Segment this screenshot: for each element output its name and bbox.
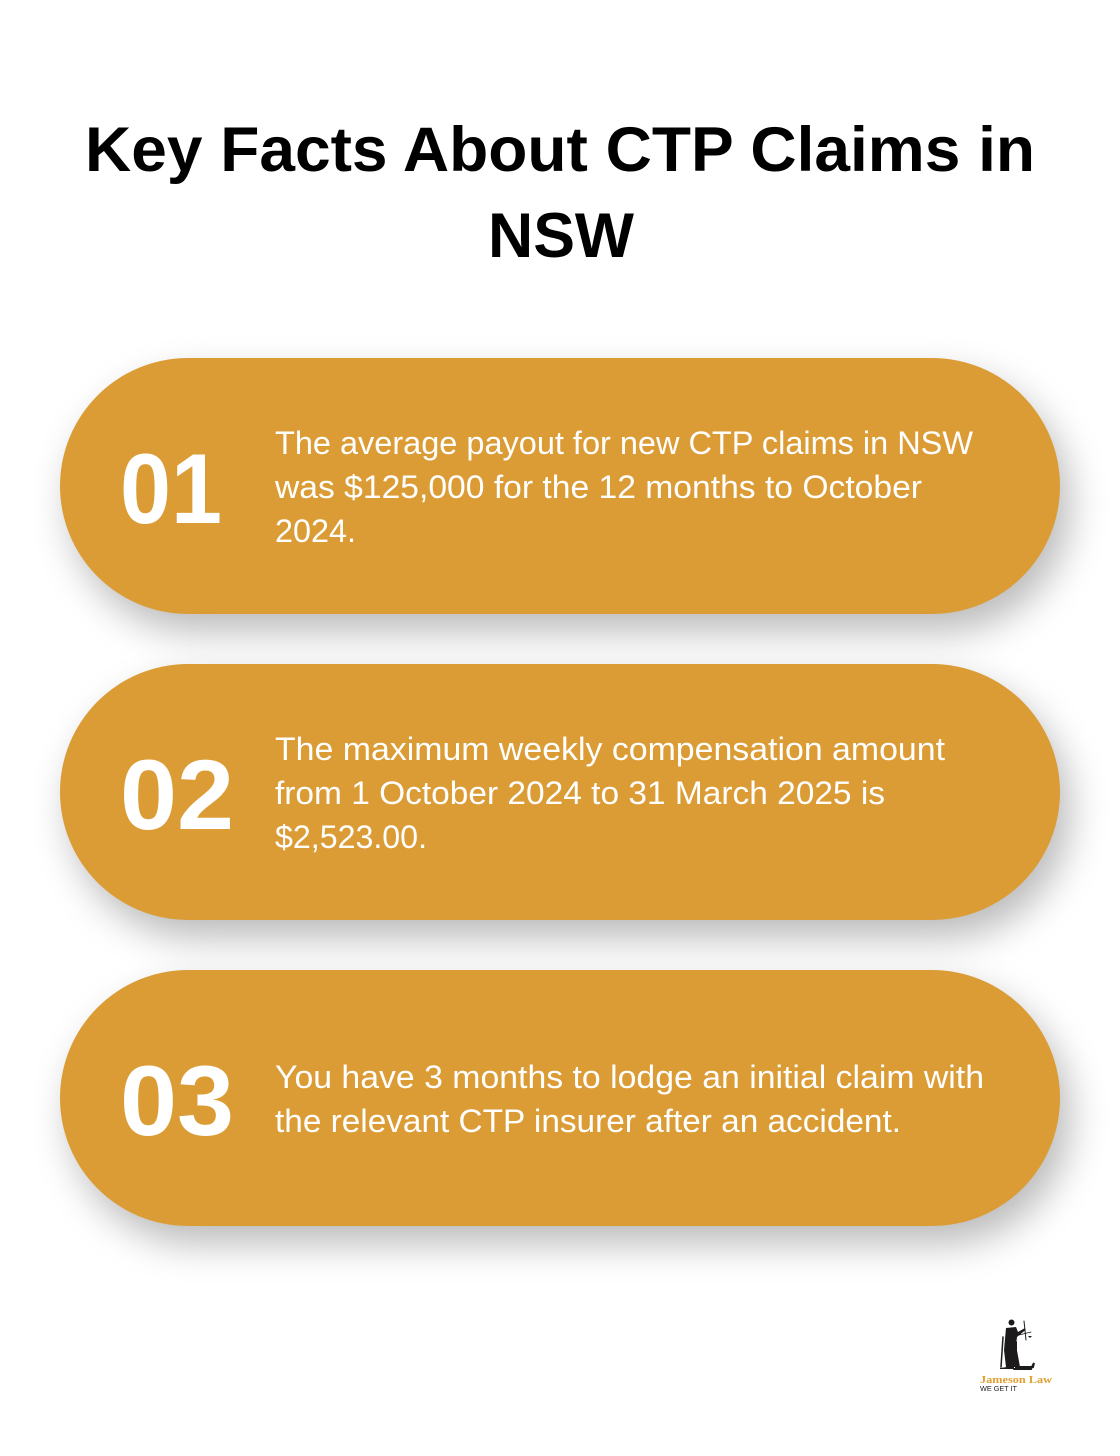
- number 03: 03: [120, 1045, 234, 1156]
- text block: fact 1: was $125,000 for the 12 months to October: [274, 469, 922, 505]
- text block: fact 3: [275, 1059, 984, 1139]
- title: NSW: [488, 201, 635, 271]
- title: [85, 115, 1035, 271]
- logo tagline: WE GET IT: [980, 1386, 1018, 1393]
- text block: fact 2: [275, 731, 945, 855]
- text block: fact 2: The maximum weekly compensation amount: [275, 731, 945, 767]
- text block: fact 1: The average payout for new CTP claims in NSW: [275, 425, 974, 461]
- text block: fact 3: You have 3 months to lodge an initial claim with: [275, 1059, 984, 1095]
- number 02: 02: [120, 739, 234, 850]
- panel: fact 1 background: [60, 358, 1060, 614]
- title: Key Facts About CTP Claims in: [85, 115, 1035, 185]
- text block: fact 3: the relevant CTP insurer after an accident.: [275, 1103, 901, 1139]
- logo wordmark: Jameson Law: [980, 1374, 1052, 1386]
- text block: fact 2: $2,523.00.: [275, 819, 427, 855]
- text block: fact 1: 2024.: [275, 513, 356, 549]
- number 01: 01: [120, 433, 222, 544]
- panel: fact 2 background: [60, 664, 1060, 920]
- icon: lady justice figure: [1000, 1320, 1034, 1369]
- panel: fact 3 background: [60, 970, 1060, 1226]
- logo: Jameson Law: [980, 1320, 1052, 1393]
- text block: fact 2: from 1 October 2024 to 31 March 2025 is: [275, 775, 885, 811]
- text block: fact 1: [274, 425, 974, 549]
